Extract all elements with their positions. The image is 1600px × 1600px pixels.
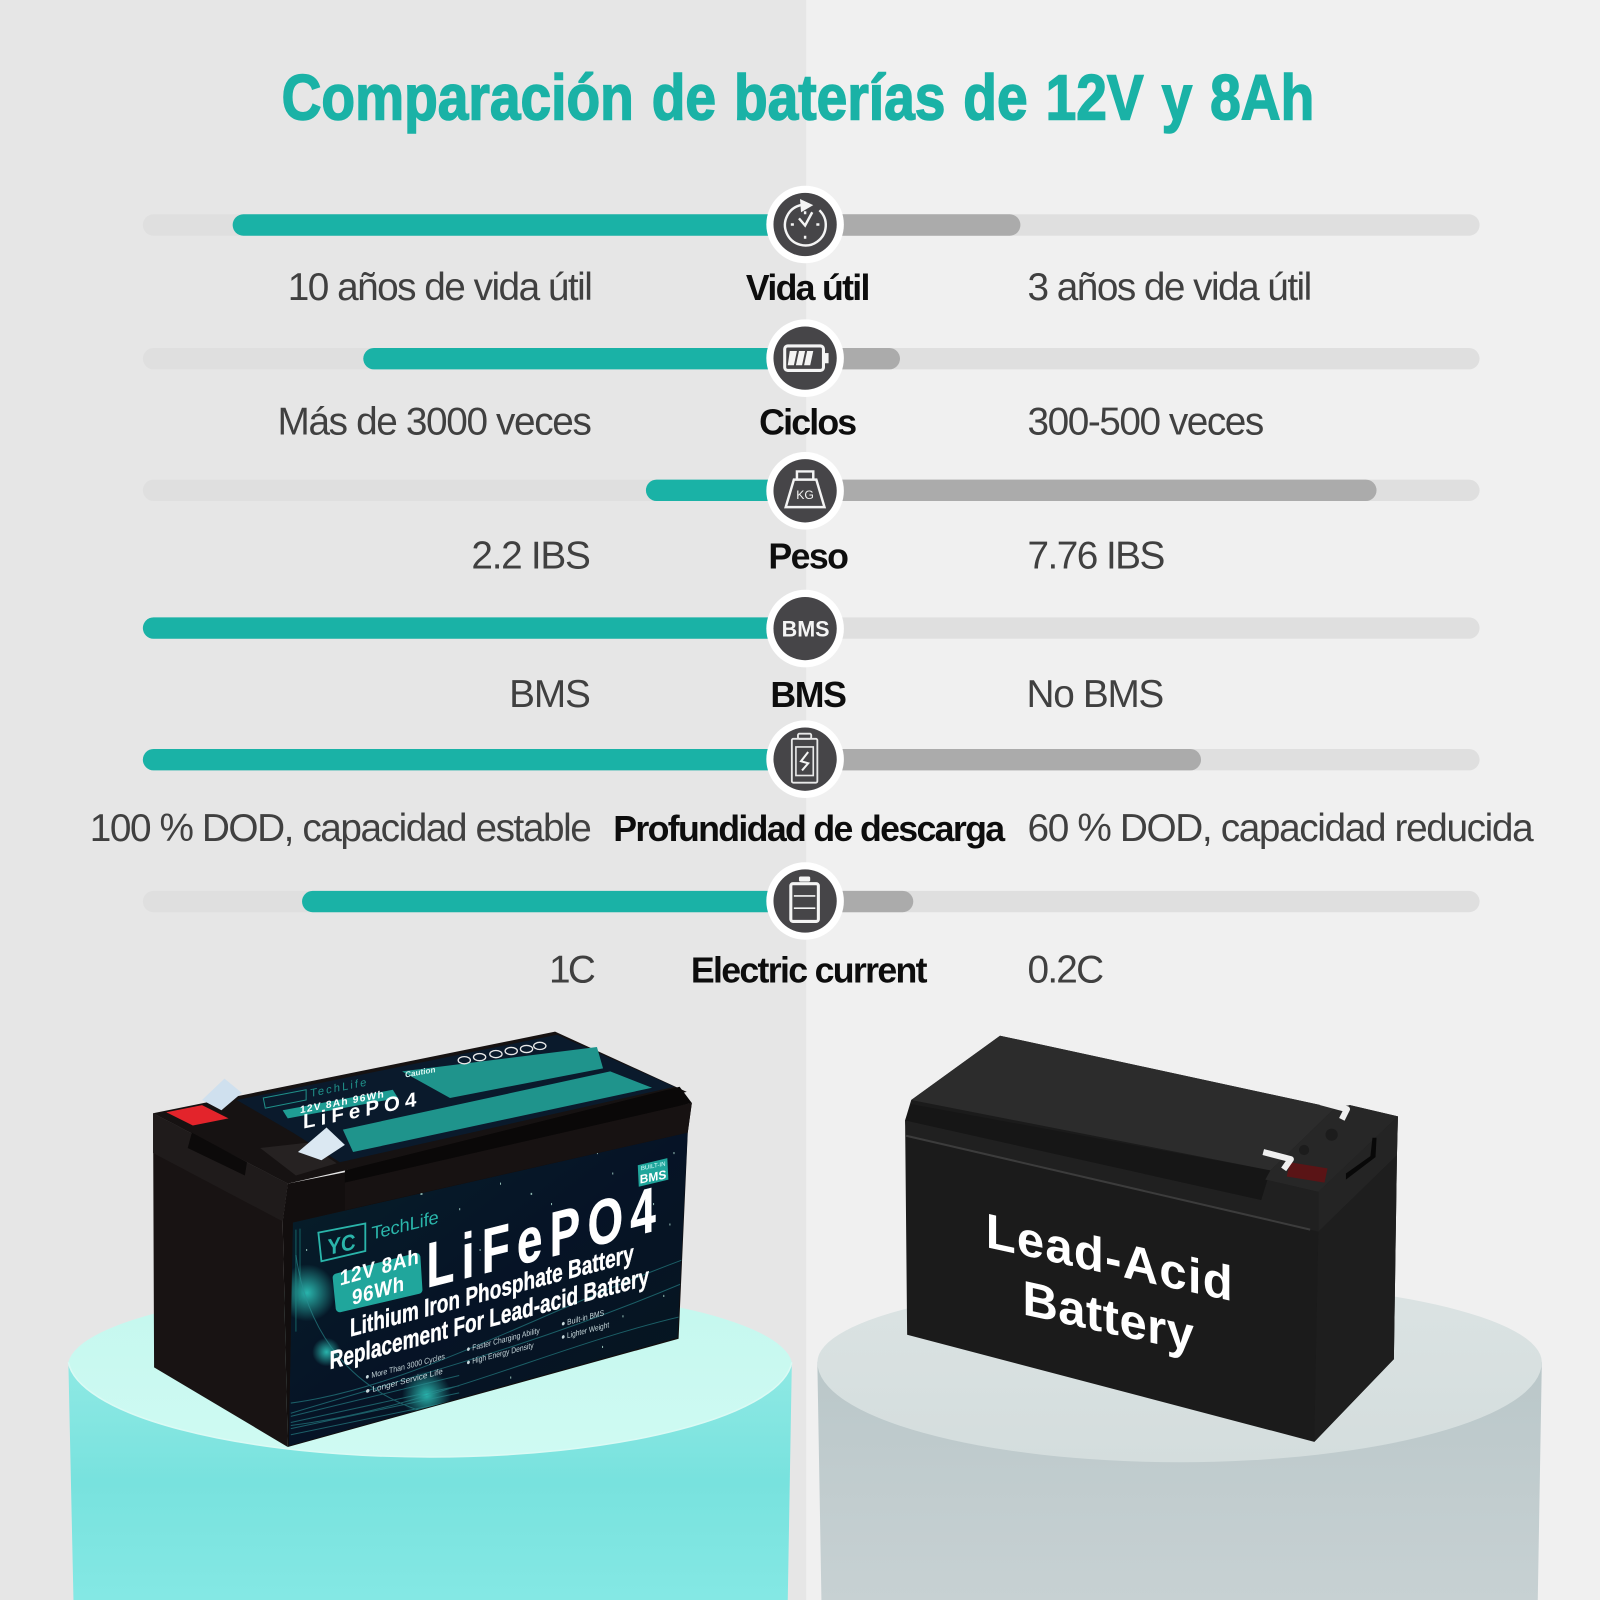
label: Profundidad de descarga <box>613 809 1006 849</box>
badge: built-in BMS: BMS <box>640 1167 666 1187</box>
badge: 12V 8Ah 96Wh: 12V 8Ah <box>340 1244 419 1291</box>
small LiFePO4: LiFePO4 <box>303 1088 417 1134</box>
text: Replacement For Lead-acid Battery: Replacement For Lead-acid Battery <box>330 1263 649 1375</box>
top label <box>237 1035 674 1162</box>
feature bullets: ● Faster Charging Ability <box>466 1325 540 1354</box>
value: left: 100 % DOD, capacidad estable <box>90 807 592 850</box>
pedestal: teal <box>68 1285 792 1600</box>
row: Electric current <box>143 862 1480 992</box>
feature bullets: ● Built-in BMS <box>561 1307 604 1328</box>
front label <box>279 1133 688 1446</box>
value: left: 10 años de vida útil <box>288 266 593 309</box>
text: Battery: Battery <box>1022 1270 1194 1363</box>
terminal: negative <box>298 1128 345 1160</box>
label: Vida útil <box>746 268 870 308</box>
terminal: negative <box>1320 1102 1347 1119</box>
battery body <box>153 1032 692 1447</box>
terminal: positive <box>166 1079 242 1126</box>
track <box>143 891 1480 912</box>
bar: LiFePO4 <box>143 617 805 639</box>
bar: LiFePO4 <box>302 891 805 912</box>
bar: lead-acid <box>805 891 913 912</box>
track <box>143 617 1480 639</box>
bar: LiFePO4 <box>143 749 805 770</box>
row: Profundidad de descarga <box>90 720 1534 850</box>
value: right: 300-500 veces <box>1028 401 1264 444</box>
track <box>143 480 1480 501</box>
track <box>143 214 1480 236</box>
value: right: 3 años de vida útil <box>1028 266 1312 309</box>
background left panel <box>0 0 806 1600</box>
pedestal: grey <box>817 1281 1542 1600</box>
feature bullets: ● Longer Service Life <box>365 1366 443 1396</box>
badge: 12V 8Ah 96Wh: 96Wh <box>352 1272 404 1310</box>
badge: built-in BMS <box>638 1158 668 1187</box>
bar: lead-acid <box>805 348 900 369</box>
value: left: 1C <box>549 949 596 992</box>
icon: weight <box>766 452 844 530</box>
icon: BMS: BMS <box>782 617 830 642</box>
label: BMS <box>770 675 847 715</box>
text: Lead-Acid: Lead-Acid <box>986 1202 1233 1312</box>
value: right: 7.76 IBS <box>1028 534 1165 577</box>
text: LiFePO4: LiFePO4 <box>427 1174 656 1301</box>
logo: YC TechLife: YC <box>328 1228 356 1260</box>
label: Peso <box>768 536 849 576</box>
row: Vida útil <box>143 186 1480 309</box>
row: Peso <box>143 452 1480 577</box>
small logo: TechLife <box>310 1077 366 1100</box>
bar: LiFePO4 <box>646 480 805 501</box>
bar: LiFePO4 <box>233 214 805 236</box>
terminal: positive <box>1263 1152 1328 1183</box>
track <box>143 749 1480 770</box>
small badge <box>283 1089 398 1118</box>
title: Comparación de baterías de 12V y 8Ah <box>282 61 1314 133</box>
value: left: Más de 3000 veces <box>278 401 592 444</box>
icon: charge <box>766 720 844 798</box>
badge: built-in BMS: BUILT-IN <box>641 1161 665 1172</box>
feature bullets: ● More Than 3000 Cycles <box>365 1351 445 1382</box>
value: right: No BMS <box>1027 673 1164 716</box>
value: left: 2.2 IBS <box>471 534 591 577</box>
bar: LiFePO4 <box>363 348 805 369</box>
logo: YC TechLife <box>318 1206 439 1261</box>
caution panel: Caution <box>405 1065 435 1080</box>
icon: weight: KG <box>796 488 814 502</box>
small badge: 12V 8Ah 96Wh <box>300 1089 384 1116</box>
icon: battery <box>766 319 844 397</box>
logo: YC TechLife: TechLife <box>371 1206 439 1244</box>
value: right: 0.2C <box>1028 949 1104 992</box>
track <box>143 348 1480 369</box>
lead-acid battery <box>905 1036 1398 1442</box>
small logo <box>263 1077 366 1108</box>
caution panel <box>402 1047 603 1098</box>
bar: lead-acid <box>805 214 1020 236</box>
LiFePO4 battery <box>153 1032 692 1447</box>
label: Electric current <box>691 951 928 991</box>
battery body <box>905 1036 1398 1442</box>
row: Ciclos <box>143 319 1480 444</box>
feature bullets: ● Lighter Weight <box>561 1319 610 1342</box>
safety icons <box>458 1042 546 1064</box>
icon: battery cells <box>766 862 844 940</box>
specifications panel <box>343 1071 652 1152</box>
icon: BMS <box>766 590 844 667</box>
bar: lead-acid <box>805 480 1377 501</box>
icon: clock <box>766 186 844 263</box>
value: right: 60 % DOD, capacidad reducida <box>1028 807 1534 850</box>
bar: lead-acid <box>805 749 1201 770</box>
feature bullets <box>365 1307 610 1396</box>
background right panel <box>806 0 1600 1600</box>
feature bullets: ● High Energy Density <box>466 1340 534 1367</box>
badge: 12V 8Ah 96Wh <box>337 1244 419 1310</box>
text: Lithium Iron Phosphate Battery: Lithium Iron Phosphate Battery <box>350 1240 634 1343</box>
label: Ciclos <box>759 403 857 443</box>
value: left: BMS <box>509 673 591 716</box>
row: BMS <box>143 590 1480 716</box>
